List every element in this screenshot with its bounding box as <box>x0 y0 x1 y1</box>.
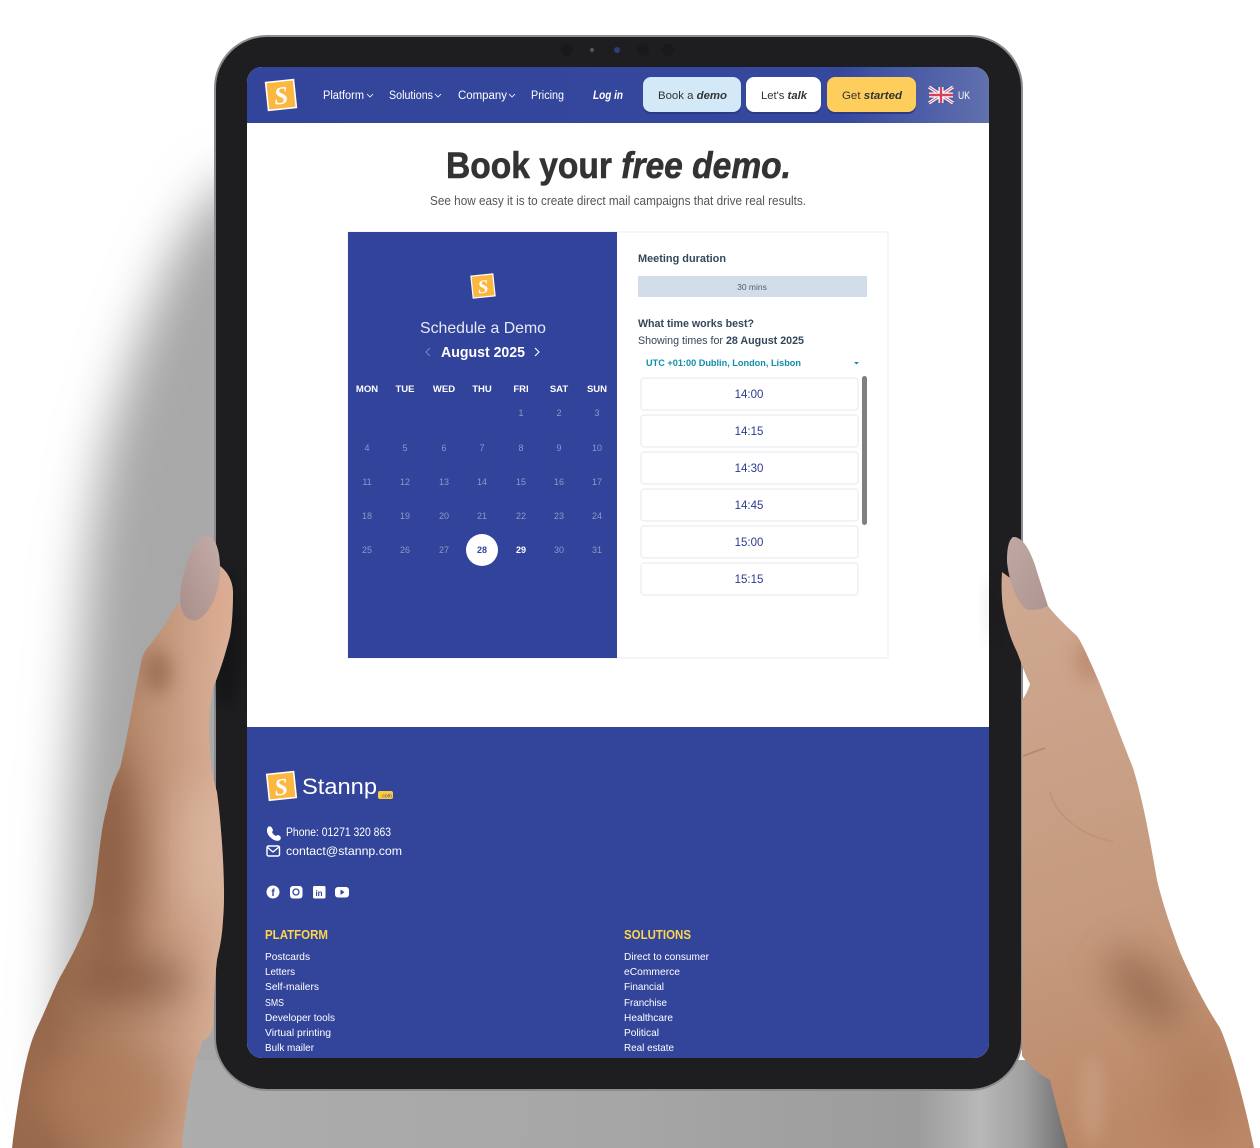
calendar dates: 14 <box>477 477 487 487</box>
social icons: in <box>315 889 323 898</box>
duration bar: 30 mins <box>737 282 767 292</box>
calendar logo: S <box>477 276 490 298</box>
tablet device <box>215 36 1022 1090</box>
footer column: platform: SMS <box>265 997 284 1009</box>
footer column: solutions: Real estate <box>624 1042 674 1054</box>
time slots: 14:45 <box>735 500 763 512</box>
front cameras <box>561 44 674 56</box>
button: Book a demo <box>643 77 741 114</box>
button: Book a demo: Book a demo <box>658 90 727 102</box>
nav links: Log in <box>593 90 623 102</box>
footer column: solutions: Direct to consumer <box>624 951 709 963</box>
calendar dates: 18 <box>362 511 372 521</box>
calendar dates: 28 <box>477 545 487 555</box>
weekday headers: WED <box>433 384 455 395</box>
month selector: August 2025 <box>441 345 525 361</box>
booking card <box>348 232 888 658</box>
calendar logo <box>471 274 495 299</box>
calendar dates: 12 <box>400 477 410 487</box>
button: Let's talk: Let's talk <box>761 90 808 102</box>
calendar dates: 4 <box>364 443 370 453</box>
calendar dates: 1 <box>518 408 524 418</box>
UK flag <box>929 87 953 103</box>
footer logo: .com <box>381 794 392 800</box>
calendar dates: 15 <box>516 477 526 487</box>
footer column: platform: Self-mailers <box>265 981 319 993</box>
weekday headers: TUE <box>396 384 414 395</box>
calendar dates: 10 <box>592 443 602 453</box>
calendar dates: 3 <box>594 408 600 418</box>
nav links: Platform <box>323 90 364 102</box>
nav links: Company <box>458 90 507 102</box>
social icons: f <box>271 888 275 899</box>
footer column: platform: Bulk mailer <box>265 1042 314 1054</box>
nav links <box>323 90 623 102</box>
footer column: platform: Postcards <box>265 951 310 963</box>
footer logo <box>267 772 393 802</box>
right hand <box>1000 530 1260 1148</box>
footer logo: S <box>273 774 289 802</box>
panel: time selection <box>638 253 867 595</box>
time slots: 15:00 <box>735 537 763 549</box>
calendar title: Schedule a Demo <box>420 320 546 337</box>
calendar dates: 24 <box>592 511 602 521</box>
nav links: Pricing <box>531 90 564 102</box>
calendar dates: 27 <box>439 545 449 555</box>
panel: calendar <box>348 232 617 658</box>
calendar dates: 23 <box>554 511 564 521</box>
footer column: platform <box>265 927 335 1054</box>
phone: Phone: 01271 320 863 <box>286 825 391 839</box>
weekday headers <box>356 384 607 395</box>
meeting duration label: Meeting duration <box>638 253 726 265</box>
weekday headers: MON <box>356 384 378 395</box>
footer column: platform: Developer tools <box>265 1012 335 1024</box>
footer column: solutions: Financial <box>624 981 664 993</box>
calendar dates: 13 <box>439 477 449 487</box>
time slots: 14:00 <box>735 389 763 401</box>
footer logo: Stannp <box>302 774 377 799</box>
drop shadow of tablet <box>60 170 1070 1148</box>
selected date: Showing times for 28 August 2025 <box>638 335 804 347</box>
footer column: solutions: Healthcare <box>624 1012 673 1024</box>
calendar dates: 5 <box>402 443 408 453</box>
weekday headers: THU <box>472 384 492 395</box>
weekday headers: FRI <box>513 384 529 395</box>
calendar dates: 7 <box>479 443 485 453</box>
phone <box>267 825 391 841</box>
email: contact@stannp.com <box>286 844 402 858</box>
calendar dates: 9 <box>556 443 562 453</box>
calendar dates: 19 <box>400 511 410 521</box>
time prompt: What time works best? <box>638 318 754 330</box>
calendar dates <box>362 408 602 566</box>
nav logo <box>266 80 296 111</box>
left hand <box>0 530 240 1148</box>
calendar dates: 6 <box>441 443 447 453</box>
title: Book your free demo. <box>446 145 791 186</box>
footer column: solutions: eCommerce <box>624 966 680 978</box>
calendar dates: 8 <box>518 443 524 453</box>
calendar dates: 21 <box>477 511 487 521</box>
footer column: solutions: Political <box>624 1027 659 1039</box>
calendar dates: 29 <box>516 545 526 555</box>
weekday headers: SAT <box>550 384 568 395</box>
footer column: solutions: Franchise <box>624 997 667 1009</box>
calendar dates: 20 <box>439 511 449 521</box>
nav links: Solutions <box>389 90 433 102</box>
footer column: platform: Letters <box>265 966 295 978</box>
footer column: solutions: SOLUTIONS <box>624 927 691 942</box>
right thumbnail <box>1007 537 1048 610</box>
nav logo: S <box>273 82 289 111</box>
calendar dates: 30 <box>554 545 564 555</box>
calendar dates: 11 <box>362 477 372 487</box>
time slots: 14:15 <box>735 426 763 438</box>
calendar dates: 22 <box>516 511 526 521</box>
timezone selector: UTC +01:00 Dublin, London, Lisbon <box>646 358 801 369</box>
scrollbar <box>862 376 867 525</box>
footer column: solutions <box>624 927 709 1054</box>
footer column: platform: Virtual printing <box>265 1027 331 1039</box>
calendar dates: 31 <box>592 545 602 555</box>
subtitle: See how easy it is to create direct mail campaigns that drive real results. <box>430 194 806 208</box>
time slots: 15:15 <box>735 574 763 586</box>
calendar dates: 16 <box>554 477 564 487</box>
button: Get started: Get started <box>842 90 902 102</box>
navigation bar <box>247 67 989 123</box>
UK label: UK <box>958 90 971 102</box>
footer background <box>247 727 989 1058</box>
social icons <box>266 886 349 899</box>
screen <box>247 67 998 1058</box>
duration bar <box>638 276 867 297</box>
footer column: platform: PLATFORM <box>265 927 328 942</box>
left thumbnail <box>180 536 220 620</box>
thumb shadow on screen <box>986 576 998 644</box>
button: Get started <box>827 77 916 114</box>
button: Let's talk <box>746 77 821 114</box>
calendar dates: 17 <box>592 477 602 487</box>
time slots <box>641 378 858 595</box>
calendar dates: 2 <box>556 408 562 418</box>
weekday headers: SUN <box>587 384 607 395</box>
time slots: 14:30 <box>735 463 763 475</box>
calendar dates: 25 <box>362 545 372 555</box>
calendar dates: 26 <box>400 545 410 555</box>
